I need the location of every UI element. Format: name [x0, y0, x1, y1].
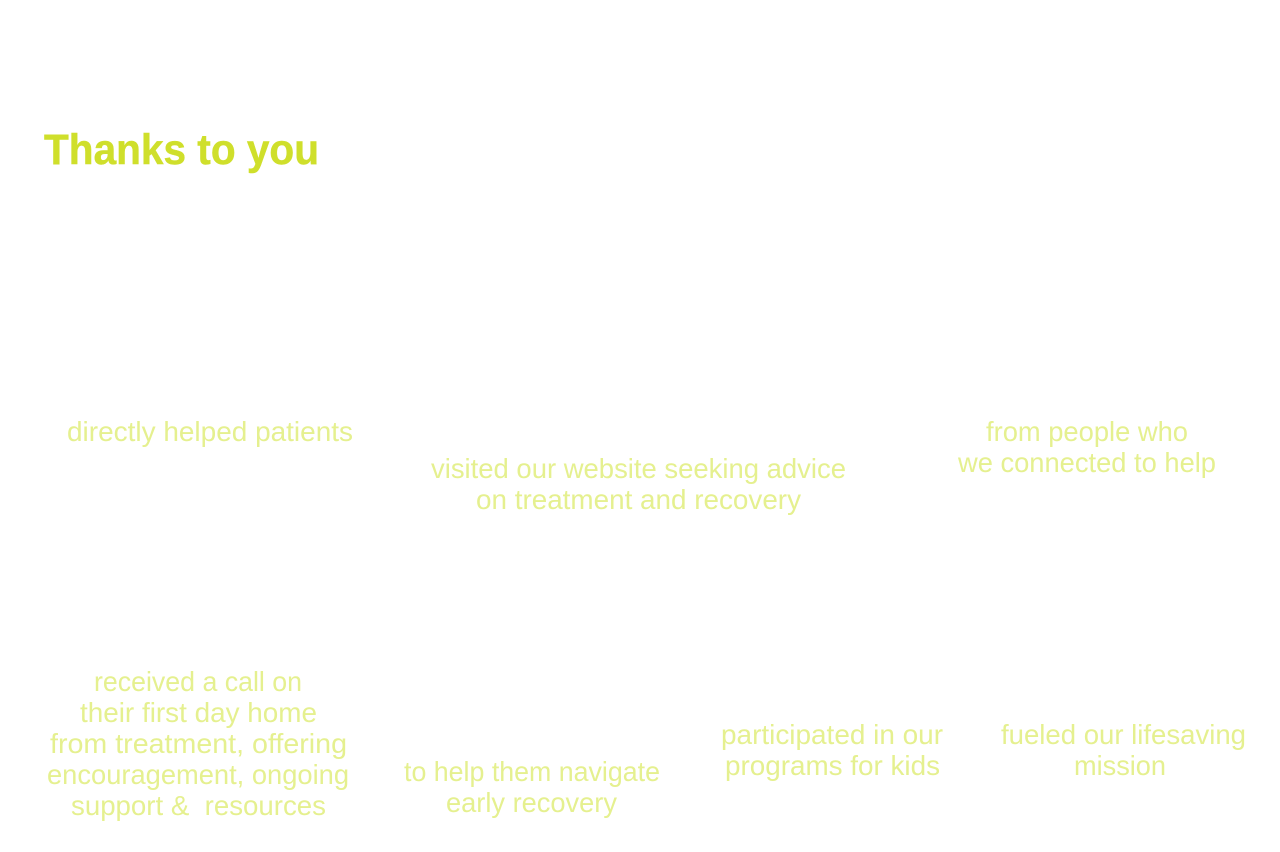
text block: early recovery: to help them navigate: [404, 756, 660, 787]
text block: programs for kids: programs for kids: [725, 750, 940, 781]
text block: first day home call: support & resources: [71, 790, 326, 821]
text block: programs for kids: [721, 719, 943, 781]
text block: lifesaving mission: fueled our lifesaving: [1001, 719, 1246, 750]
text block: first day home call: their first day home: [80, 697, 317, 728]
text block: first day home call: received a call on: [94, 666, 302, 697]
text block: lifesaving mission: [1001, 719, 1246, 781]
text block: lifesaving mission: mission: [1074, 750, 1166, 781]
text block: first day home call: encouragement, ongoing: [47, 759, 349, 790]
text block: programs for kids: participated in our: [721, 719, 943, 750]
text block: directly helped patients: directly helped patients: [67, 416, 353, 447]
text block: website visitors: [431, 453, 846, 515]
text block: website visitors: on treatment and recovery: [476, 484, 801, 515]
text block: early recovery: early recovery: [446, 787, 617, 818]
text block: from people we connected: we connected to help: [957, 447, 1216, 478]
text block: from people we connected: from people who: [986, 416, 1188, 447]
text block: from people we connected: [957, 416, 1216, 478]
text block: early recovery: [404, 756, 660, 818]
text block: first day home call: from treatment, offering: [50, 728, 347, 759]
text block: website visitors: visited our website seeking advice: [431, 453, 846, 484]
title: Thanks to you: [44, 126, 319, 174]
text block: first day home call: [47, 666, 349, 821]
